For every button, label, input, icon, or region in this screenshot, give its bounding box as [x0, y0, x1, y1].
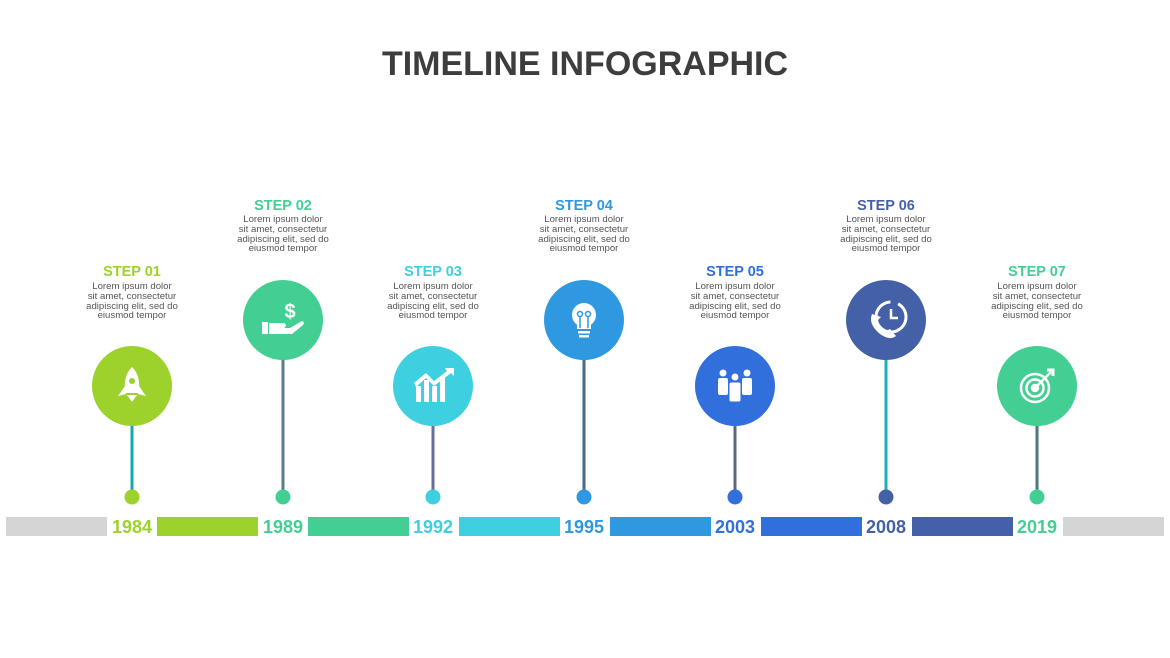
- icon: rocket: [118, 367, 146, 402]
- step 07: eiusmod tempor: [1003, 310, 1072, 321]
- step 03: sit amet, consectetur: [389, 291, 478, 302]
- step 02: [237, 198, 329, 504]
- step 01: [86, 264, 178, 504]
- step 01: Lorem ipsum dolor: [92, 281, 173, 292]
- step 04: sit amet, consectetur: [540, 224, 629, 235]
- step 03: eiusmod tempor: [399, 310, 468, 321]
- step 05: STEP 05: [706, 264, 764, 280]
- step 01: STEP 01: [103, 264, 161, 280]
- step 07: adipiscing elit, sed do: [991, 301, 1083, 312]
- step 06: adipiscing elit, sed do: [840, 234, 932, 245]
- timeline bar: 2008: [866, 517, 906, 537]
- step 04: Lorem ipsum dolor: [544, 214, 625, 225]
- step 04: STEP 04: [555, 198, 613, 214]
- step 04: eiusmod tempor: [550, 243, 619, 254]
- step 03: STEP 03: [404, 264, 462, 280]
- step 05: Lorem ipsum dolor: [695, 281, 776, 292]
- step 06: sit amet, consectetur: [842, 224, 931, 235]
- step 02: eiusmod tempor: [249, 243, 318, 254]
- step 04: adipiscing elit, sed do: [538, 234, 630, 245]
- icon: phone clock: [871, 302, 906, 338]
- step 07: Lorem ipsum dolor: [997, 281, 1078, 292]
- step 07: sit amet, consectetur: [993, 291, 1082, 302]
- timeline bar: 1989: [263, 517, 303, 537]
- step 01: eiusmod tempor: [98, 310, 167, 321]
- step 06: STEP 06: [857, 198, 915, 214]
- step 02: sit amet, consectetur: [239, 224, 328, 235]
- step 05: sit amet, consectetur: [691, 291, 780, 302]
- icon: people: [718, 370, 752, 402]
- step 03: Lorem ipsum dolor: [393, 281, 474, 292]
- step 04: [538, 198, 630, 504]
- timeline bar: 1992: [413, 517, 453, 537]
- step 06: Lorem ipsum dolor: [846, 214, 927, 225]
- icon: money hand: [262, 301, 304, 334]
- step 06: eiusmod tempor: [852, 243, 921, 254]
- step 01: sit amet, consectetur: [88, 291, 177, 302]
- step 07: STEP 07: [1008, 264, 1066, 280]
- icon: chart: [414, 368, 454, 402]
- step 06: [840, 198, 932, 504]
- title: TIMELINE INFOGRAPHIC: [382, 45, 788, 83]
- step 05: adipiscing elit, sed do: [689, 301, 781, 312]
- timeline bar: 2019: [1017, 517, 1057, 537]
- icon: target: [1021, 370, 1053, 402]
- timeline bar: 2003: [715, 517, 755, 537]
- icon: money hand: $: [284, 301, 296, 323]
- step 02: adipiscing elit, sed do: [237, 234, 329, 245]
- timeline bar: [6, 517, 1164, 537]
- step 01: adipiscing elit, sed do: [86, 301, 178, 312]
- step 02: STEP 02: [254, 198, 312, 214]
- step 03: adipiscing elit, sed do: [387, 301, 479, 312]
- step 05: [689, 264, 781, 504]
- timeline bar: 1984: [112, 517, 152, 537]
- step 07: [991, 264, 1083, 504]
- step 05: eiusmod tempor: [701, 310, 770, 321]
- icon: bulb: [572, 303, 596, 338]
- step 03: [387, 264, 479, 504]
- timeline bar: 1995: [564, 517, 604, 537]
- step 02: Lorem ipsum dolor: [243, 214, 324, 225]
